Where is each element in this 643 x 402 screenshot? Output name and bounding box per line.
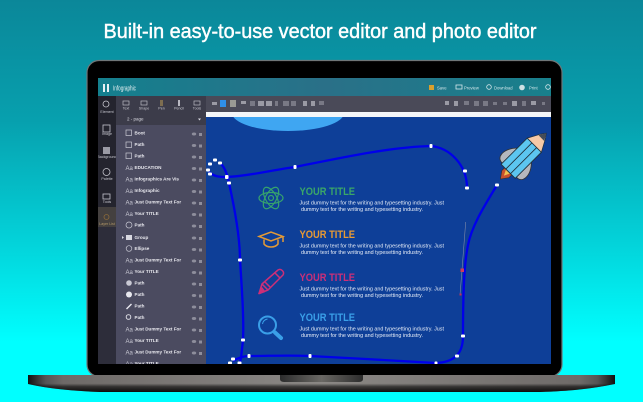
item 1: atom icon [259, 185, 283, 211]
app header [98, 78, 551, 96]
editable blue vector path [209, 146, 497, 366]
layers panel [116, 96, 206, 368]
panel tools: Pen [158, 106, 165, 110]
layer rows: Just Dummy Text For [134, 350, 181, 354]
laptop base [28, 375, 615, 392]
left tool rail: Palette [101, 177, 113, 181]
item 3 text [300, 272, 444, 299]
panel tools: Pencil [174, 106, 184, 110]
rocket pencil body [501, 138, 541, 178]
item 2 text: dummy text for the writing and typesetting industry. [301, 250, 423, 256]
left tool rail [97, 96, 117, 364]
left tool rail: Background [97, 155, 117, 159]
layer rows: Path [134, 142, 145, 147]
item 4: magnifier icon [259, 316, 281, 338]
item 2 text [300, 229, 444, 256]
item 4 text [300, 312, 444, 339]
laptop [28, 60, 615, 392]
layer rows: Path [134, 315, 145, 320]
panel tools: Shape [139, 106, 149, 110]
panel tools: Tools [193, 106, 201, 110]
title: Built-in easy-to-use vector editor and photo editor [104, 20, 537, 43]
layer rows: Aa [126, 178, 134, 184]
rocket flame [500, 168, 512, 180]
layer rows: Path [134, 280, 145, 286]
layer rows: Aa [126, 362, 134, 368]
item 4 text: YOUR TITLE [300, 312, 355, 324]
app header: Infographic [113, 86, 136, 92]
layer rows: Path [134, 292, 145, 297]
item 1 text: Just dummy text for the writing and typesetting industry. Just [300, 200, 444, 206]
app header: Save [437, 86, 447, 90]
layer rows: Aa [126, 270, 134, 276]
item 1 text: dummy text for the writing and typesetting industry. [301, 207, 423, 213]
layer rows: Path [134, 304, 145, 308]
item 3 text: dummy text for the writing and typesetting industry. [301, 293, 423, 299]
layer rows: Aa [126, 258, 134, 264]
layer rows: Group [134, 235, 148, 240]
layer rows: Your TITLE [134, 211, 159, 216]
light blue semicircle [234, 117, 342, 131]
path anchor points [206, 144, 499, 364]
canvas [206, 117, 551, 364]
item 1 text [300, 186, 444, 213]
bezier control handle [460, 222, 466, 295]
layer rows: EDUCATION [134, 165, 162, 170]
item 3 text: Just dummy text for the writing and typesetting industry. Just [300, 286, 444, 292]
item 4 text: Just dummy text for the writing and typesetting industry. Just [300, 326, 444, 332]
layer rows: Ellipse [134, 246, 150, 251]
rocket [500, 132, 547, 180]
layer rows: Just Dummy Text For [134, 326, 181, 332]
panel tools: Text [123, 106, 129, 110]
app header: Print [529, 86, 538, 90]
layer rows: Just Dummy Text For [134, 200, 181, 204]
top editor toolbar [206, 96, 551, 117]
layer rows: Path [134, 154, 145, 158]
layer rows: Aa [126, 339, 134, 345]
layer rows: Your TITLE [134, 361, 159, 366]
app header: Download [494, 86, 513, 90]
layer rows: Aa [126, 200, 134, 206]
item 2 text: Just dummy text for the writing and typesetting industry. Just [300, 244, 444, 250]
item 4 text: dummy text for the writing and typesetting industry. [301, 333, 423, 339]
layer rows: Aa [126, 350, 134, 356]
layer rows: Your TITLE [134, 269, 159, 274]
left tool rail: Element [100, 110, 114, 114]
panel tools [123, 100, 201, 110]
rocket pencil tip [526, 132, 547, 153]
layer rows: Aa [126, 328, 134, 334]
layer rows: Aa [126, 166, 134, 172]
layer rows: Aa [126, 212, 134, 218]
layer rows: Aa [126, 189, 134, 195]
app screen [97, 78, 558, 368]
laptop lid [87, 60, 562, 376]
item 2 text: YOUR TITLE [300, 229, 355, 241]
item 3: pencil icon [259, 269, 284, 294]
rocket wings [500, 148, 532, 180]
page selector [127, 118, 201, 122]
layer rows: Boot [134, 130, 145, 136]
left tool rail: Tools [103, 200, 111, 204]
item 2: graduation cap icon [259, 232, 283, 247]
item 3 text: YOUR TITLE [300, 272, 355, 284]
layer rows: Just Dummy Text For [134, 258, 181, 262]
page selector: 2 - page [127, 116, 144, 122]
layer rows: Infographics Are Vis [134, 176, 179, 182]
layer rows: Path [134, 222, 145, 228]
item 1 text: YOUR TITLE [300, 186, 355, 198]
left tool rail: Layer List [99, 222, 115, 226]
app header: Preview [464, 86, 480, 90]
layer rows: Infographic [134, 188, 160, 193]
layer rows: Your TITLE [134, 338, 159, 343]
left tool rail: Image [102, 132, 112, 136]
layer rows [122, 130, 181, 368]
visibility and lock toggles [192, 132, 202, 355]
